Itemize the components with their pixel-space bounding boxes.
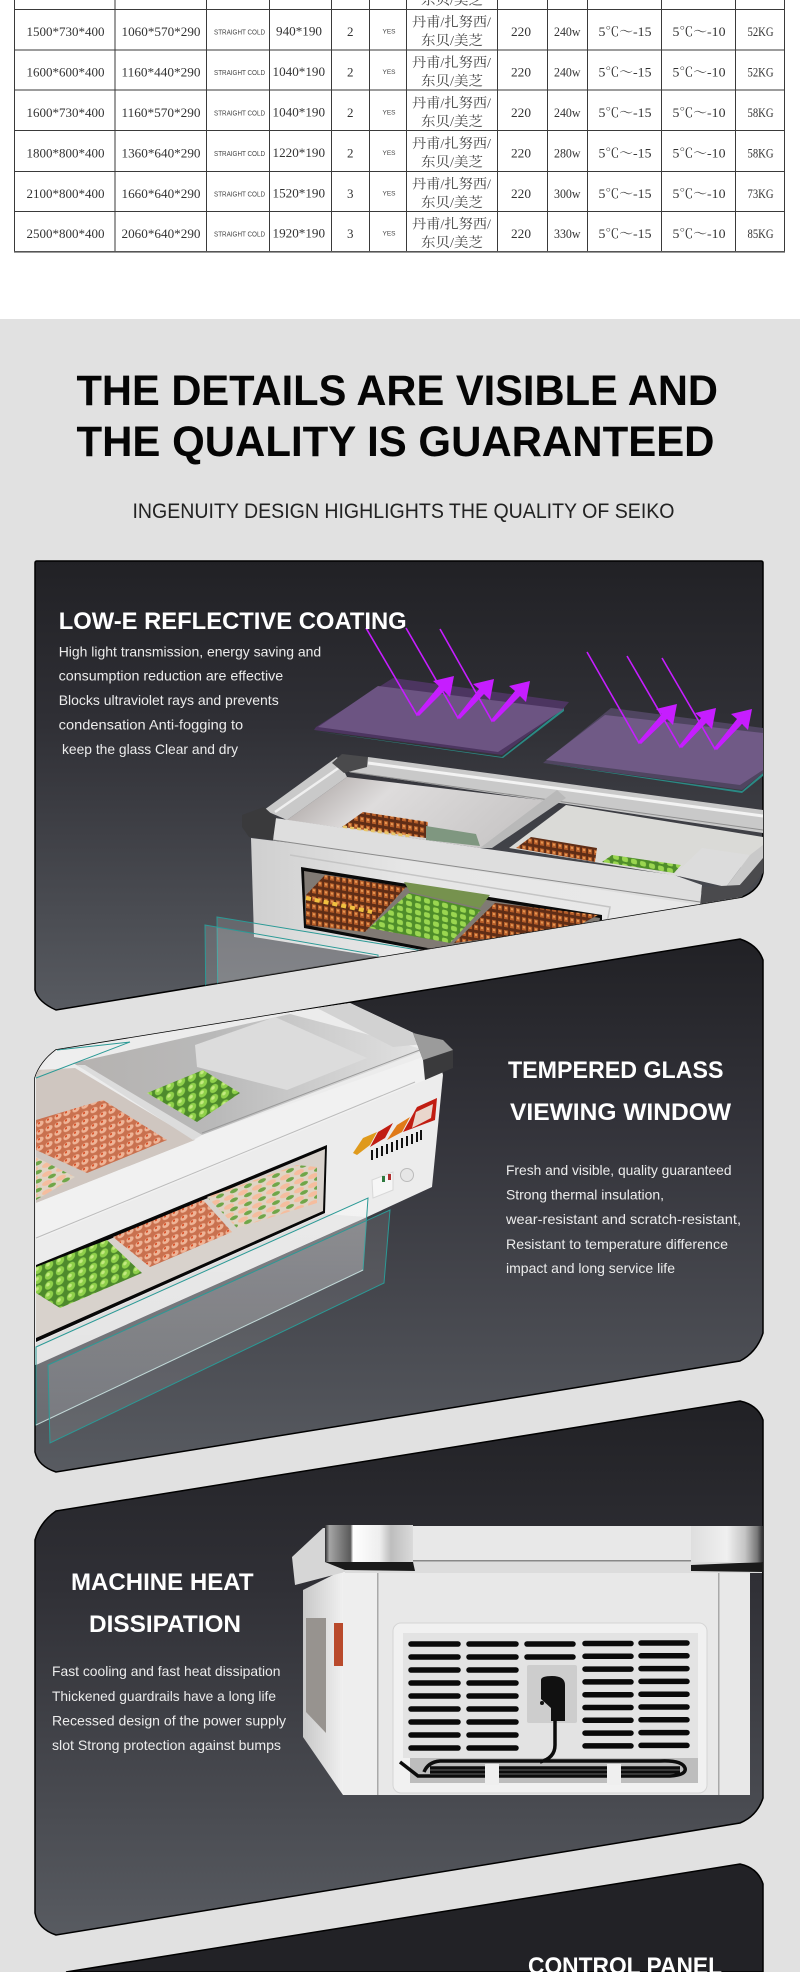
left lid compartment [36,1068,195,1203]
vent slots [411,1643,687,1748]
table row 1800*800*400: 5℃～-15 [598,145,652,160]
table row 1600*600*400: 丹甫/扎努西/ [412,54,491,70]
chrome corner left [325,1525,415,1571]
glass panel one [36,1198,368,1425]
glass panel two [48,1210,390,1443]
white block in lid [195,1017,367,1090]
chrome corner front right [700,858,763,905]
table row 1500*730*400: 5℃～-15 [598,24,652,39]
body text [505,1162,741,1276]
table row 1800*800*400 [26,135,774,169]
table row 1500*730*400: 220 [511,24,531,39]
panel: tempered glass viewing window [35,939,763,1472]
table row 1600*730*400 [26,94,774,129]
table row 1600*600*400: 240w [554,64,581,79]
table row 2100*800*400: 1520*190 [272,185,325,200]
chrome corner front left [242,807,276,840]
freezer front frame line [290,854,611,920]
table row 1600*600*400: 220 [511,64,531,79]
table row 1500*730*400 [26,14,774,48]
light ray arrows [366,628,752,750]
body text: slot Strong protection against bumps [52,1737,281,1753]
food greens upper right [602,855,681,873]
table row 2100*800*400: 5℃～-10 [672,186,726,201]
lid divider rail [480,790,566,848]
table row 1500*730*400: STRAIGHT COLD [214,28,265,36]
panel background [35,1401,763,1935]
table row 2100*800*400: 丹甫/扎努西/ [412,176,491,192]
table row 1600*600*400: 1040*190 [272,64,325,79]
table row 1500*730*400: 240w [554,24,581,39]
table row 1800*800*400: 220 [511,145,531,160]
body text: Fresh and visible, quality guaranteed [506,1162,732,1178]
table row 1500*730*400: 940*190 [276,24,322,38]
table row 1600*730*400: YES [382,109,396,116]
table row 2100*800*400: 2100*800*400 [26,186,104,201]
back rail [318,1003,417,1047]
display window [36,1145,327,1342]
chrome corner [413,1033,453,1080]
body text [59,644,321,757]
power socket recess [527,1665,577,1723]
heading: TEMPERED GLASS [508,1057,724,1084]
table row 2500*800*400: 2060*640*290 [122,226,200,241]
freezer illustration front view [35,1003,453,1443]
table row 2500*800*400: 丹甫/扎努西/ [412,216,491,232]
table row 2500*800*400 [26,216,774,250]
title: THE QUALITY IS GUARANTEED [76,418,714,466]
food row upper right [516,837,597,862]
vent panel [393,1623,707,1793]
cord clips [485,1764,499,1785]
table row 1800*800*400: 2 [347,145,354,160]
table row 1600*600*400: 5℃～-10 [672,64,726,79]
freezer rear illustration [292,1525,763,1795]
table row 1800*800*400: 东贝/美芝 [421,153,483,169]
table row 2500*800*400: 5℃～-15 [598,226,652,241]
subtitle: INGENUITY DESIGN HIGHLIGHTS THE QUALITY OF SEIKO [132,500,674,523]
table row 1600*730*400: 5℃～-15 [598,105,652,120]
table row 2100*800*400: 73KG [748,186,774,201]
table row 1500*730*400: YES [382,28,396,36]
title [76,367,718,466]
table row 1500*730*400: 东贝/美芝 [421,32,483,48]
panel background [35,561,763,1010]
freezer illustration with coated glass panes [205,678,763,1012]
lid left rail [264,757,347,820]
table row 2100*800*400: 1660*640*290 [122,186,200,201]
table row 1800*800*400: 丹甫/扎努西/ [412,135,491,151]
control switches and dial [372,1168,414,1198]
heading: DISSIPATION [89,1611,241,1638]
table row 1800*800*400: 1360*640*290 [122,145,200,160]
table row 1600*600*400: 5℃～-15 [598,64,652,79]
side face [303,1570,343,1795]
table row 1500*730*400: 5℃～-10 [672,24,726,39]
table row 1600*730*400: 丹甫/扎努西/ [412,95,491,111]
body text: Recessed design of the power supply [52,1712,286,1728]
lid right interior compartment [509,805,763,880]
title: THE DETAILS ARE VISIBLE AND [76,367,718,415]
body text: Strong thermal insulation, [506,1186,664,1202]
table row 1500*730*400: 丹甫/扎努西/ [412,14,491,30]
lid right end rail [726,845,763,887]
table row 2100*800*400 [26,176,774,210]
heading: LOW-E REFLECTIVE COATING [59,608,407,635]
top glass panel outline [36,1042,130,1078]
sticker chevrons [353,1098,437,1155]
table row 2500*800*400: 1920*190 [272,226,325,240]
body text: Thickened guardrails have a long life [52,1688,276,1704]
table row 1600*730*400: 240w [554,105,581,120]
table row 2500*800*400: 3 [347,226,354,241]
freezer silhouette [35,1003,443,1365]
body text: High light transmission, energy saving and [59,644,321,660]
coated glass pane left [314,678,569,758]
white strip under window [36,1214,367,1365]
panel: machine heat dissipation [35,1401,763,1935]
coated glass pane right [543,708,763,793]
body text: Resistant to temperature difference [506,1236,728,1252]
heading [508,1057,731,1126]
spec table (continued from previous section) [0,0,800,319]
table row 1600*730*400: STRAIGHT COLD [214,108,265,117]
table row 1800*800*400: STRAIGHT COLD [214,149,265,158]
table row 2500*800*400: 330w [554,226,581,241]
lid side [292,1528,345,1585]
lid divider [77,1065,202,1140]
table row 2500*800*400: STRAIGHT COLD [214,230,265,238]
chrome corner right [691,1526,763,1572]
panel background [35,939,763,1472]
table row 1600*730*400: 1040*190 [272,104,325,119]
heading: MACHINE HEAT [71,1569,254,1596]
food greens upper left [426,826,480,846]
power cord [400,1721,685,1776]
display window [301,867,602,952]
power plug [541,1676,565,1721]
table row 1800*800*400: 1220*190 [272,145,325,160]
body text: condensation Anti-fogging to [59,716,243,732]
rear face [343,1572,750,1795]
table row 1500*730*400: 1500*730*400 [26,24,104,39]
table row 1600*730*400: 58KG [748,105,774,120]
control panel vents [372,1130,421,1160]
heading: VIEWING WINDOW [510,1099,731,1126]
table row 1500*730*400: 2 [347,24,354,39]
table row 1500*730*400: 52KG [748,24,774,39]
lid back rail [349,757,763,833]
green vegetables in lid [147,1070,240,1122]
table row 1600*730*400: 2 [347,105,354,120]
table row 1800*800*400: 280w [554,145,581,160]
body text: keep the glass Clear and dry [62,741,238,757]
body text: Fast cooling and fast heat dissipation [52,1663,280,1679]
table row 1600*730*400: 1160*570*290 [122,105,200,120]
body text: consumption reduction are effective [59,668,283,684]
table row 2500*800*400: 220 [511,226,531,241]
table row 2500*800*400: 85KG [748,226,774,241]
table row 1600*600*400: STRAIGHT COLD [214,68,265,77]
body text: wear-resistant and scratch-resistant, [505,1211,741,1227]
table row 1600*730*400: 5℃～-10 [672,105,726,120]
table row 2500*800*400: 5℃～-10 [672,226,726,241]
panel: control panel (cropped at page bottom) [66,1864,763,1972]
table row 1800*800*400: 5℃～-10 [672,145,726,160]
table row 1600*600*400: 东贝/美芝 [421,72,483,88]
lid white end block [676,867,741,886]
removable glass panels below freezer [204,916,418,986]
chrome corner back left [332,754,368,773]
table row 1600*600*400: 1160*440*290 [122,64,200,79]
table row 1800*800*400: 1800*800*400 [26,145,104,160]
table row 1800*800*400: YES [382,150,396,157]
side sticker [334,1623,343,1666]
table row 2100*800*400: YES [382,190,396,197]
lid left interior compartment [287,777,557,848]
table row 1500*730*400: 1060*570*290 [122,24,200,39]
body text: Blocks ultraviolet rays and prevents [59,692,279,708]
table row 2500*800*400: 东贝/美芝 [421,234,483,250]
body text: impact and long service life [506,1260,675,1276]
heading [71,1569,254,1638]
table row 1600*600*400: 52KG [748,64,774,79]
table row 2100*800*400: 东贝/美芝 [421,194,483,210]
table row 2500*800*400: YES [382,230,396,238]
table row 1600*600*400 [26,54,774,88]
table row 1600*600*400: 2 [347,64,354,79]
panel background [66,1864,763,1972]
table row 2500*800*400: 2500*800*400 [26,226,104,241]
table row 1600*730*400: 1600*730*400 [26,105,104,120]
right lid compartment [73,1014,425,1135]
table row 2100*800*400: 220 [511,186,531,201]
table row 1600*600*400: 1600*600*400 [26,64,104,79]
fresh tray in lid [36,1157,75,1200]
freezer body [251,838,742,957]
skewers in lid [36,1100,167,1173]
lid centre panel [413,1526,691,1560]
table row 2100*800*400: STRAIGHT COLD [214,189,265,198]
panel: low-e reflective coating [35,561,763,1012]
table row 1600*730*400: 东贝/美芝 [421,113,483,129]
lid front rail [273,818,702,905]
table row 1600*730*400: 220 [511,105,531,120]
table row 2100*800*400: 5℃～-15 [598,186,652,201]
front rail [36,1133,207,1203]
table row 2100*800*400: 3 [347,186,354,201]
side window [306,1618,326,1733]
food row upper left [342,812,428,838]
table row 1600*600*400: YES [382,69,396,76]
table row 1800*800*400: 58KG [748,145,774,160]
glass panel one lower highlight [36,1270,363,1425]
table row 2100*800*400: 300w [554,186,581,201]
body text [52,1663,286,1753]
